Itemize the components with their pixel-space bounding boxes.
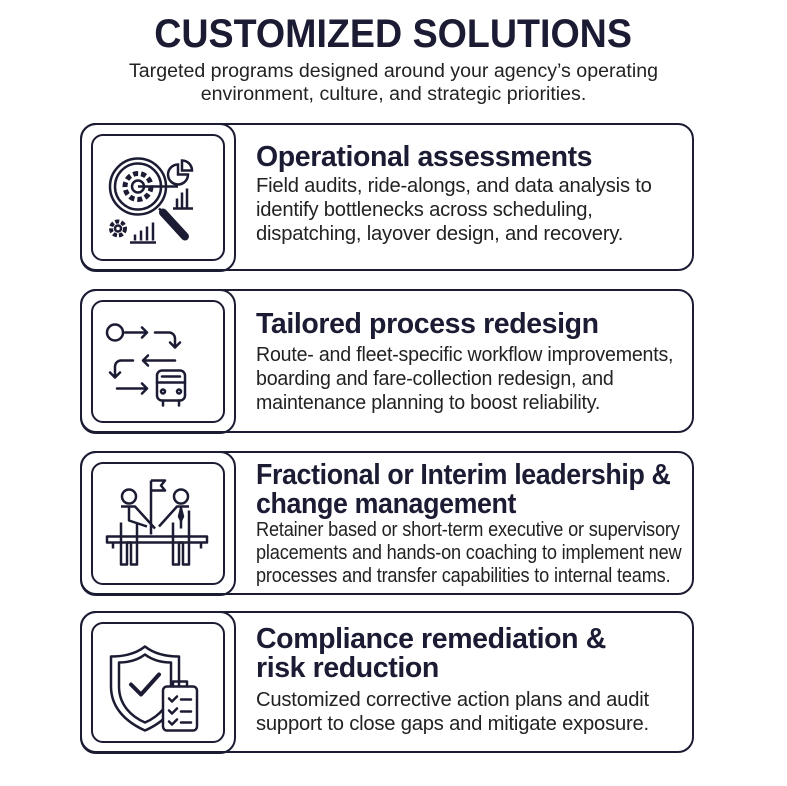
text: tailored process redesign: maintenance planning to boost reliability. [256,392,600,414]
subtitle: environment, culture, and strategic priorities. [201,83,586,105]
text: fractional leadership: placements and hands-on coaching to implement new [256,542,681,564]
text: fractional leadership: change management [256,488,516,520]
subtitle: Targeted programs designed around your agency’s operating [129,60,658,82]
icon: handshake with flag [80,450,236,596]
text: compliance remediation: Compliance remediation & [256,623,606,655]
panel: operational assessments [80,123,694,271]
text: fractional leadership: processes and transfer capabilities to internal teams. [256,565,670,587]
panel: tailored process redesign [80,289,694,433]
text: compliance remediation [256,623,649,735]
text: tailored process redesign: boarding and fare-collection redesign, and [256,368,614,390]
text: tailored process redesign: Tailored process redesign [256,308,599,340]
title: CUSTOMIZED SOLUTIONS [155,12,632,56]
text: fractional leadership [256,459,682,587]
text: operational assessments: Field audits, ride-alongs, and data analysis to [256,175,652,197]
text: fractional leadership: Fractional or Interim leadership & [256,459,670,491]
text: compliance remediation: Customized corrective action plans and audit [256,689,649,711]
text: tailored process redesign [256,308,673,414]
text: tailored process redesign: Route- and fleet-specific workflow improvements, [256,344,673,366]
text: operational assessments: identify bottlenecks across scheduling, [256,199,593,221]
panel: fractional leadership [80,451,694,595]
text: compliance remediation: risk reduction [256,652,439,684]
icon: flow arrows with bus [80,288,236,434]
subtitle [129,60,658,105]
text: fractional leadership: Retainer based or short-term executive or supervisory [256,519,680,541]
text: operational assessments: dispatching, layover design, and recovery. [256,223,623,245]
icon: magnifier with gears and charts [80,122,236,272]
text: operational assessments: Operational assessments [256,141,592,173]
panel: compliance remediation [80,611,694,753]
icon: shield with clipboard [80,610,236,754]
text: compliance remediation: support to close gaps and mitigate exposure. [256,713,649,735]
text: operational assessments [256,141,652,245]
